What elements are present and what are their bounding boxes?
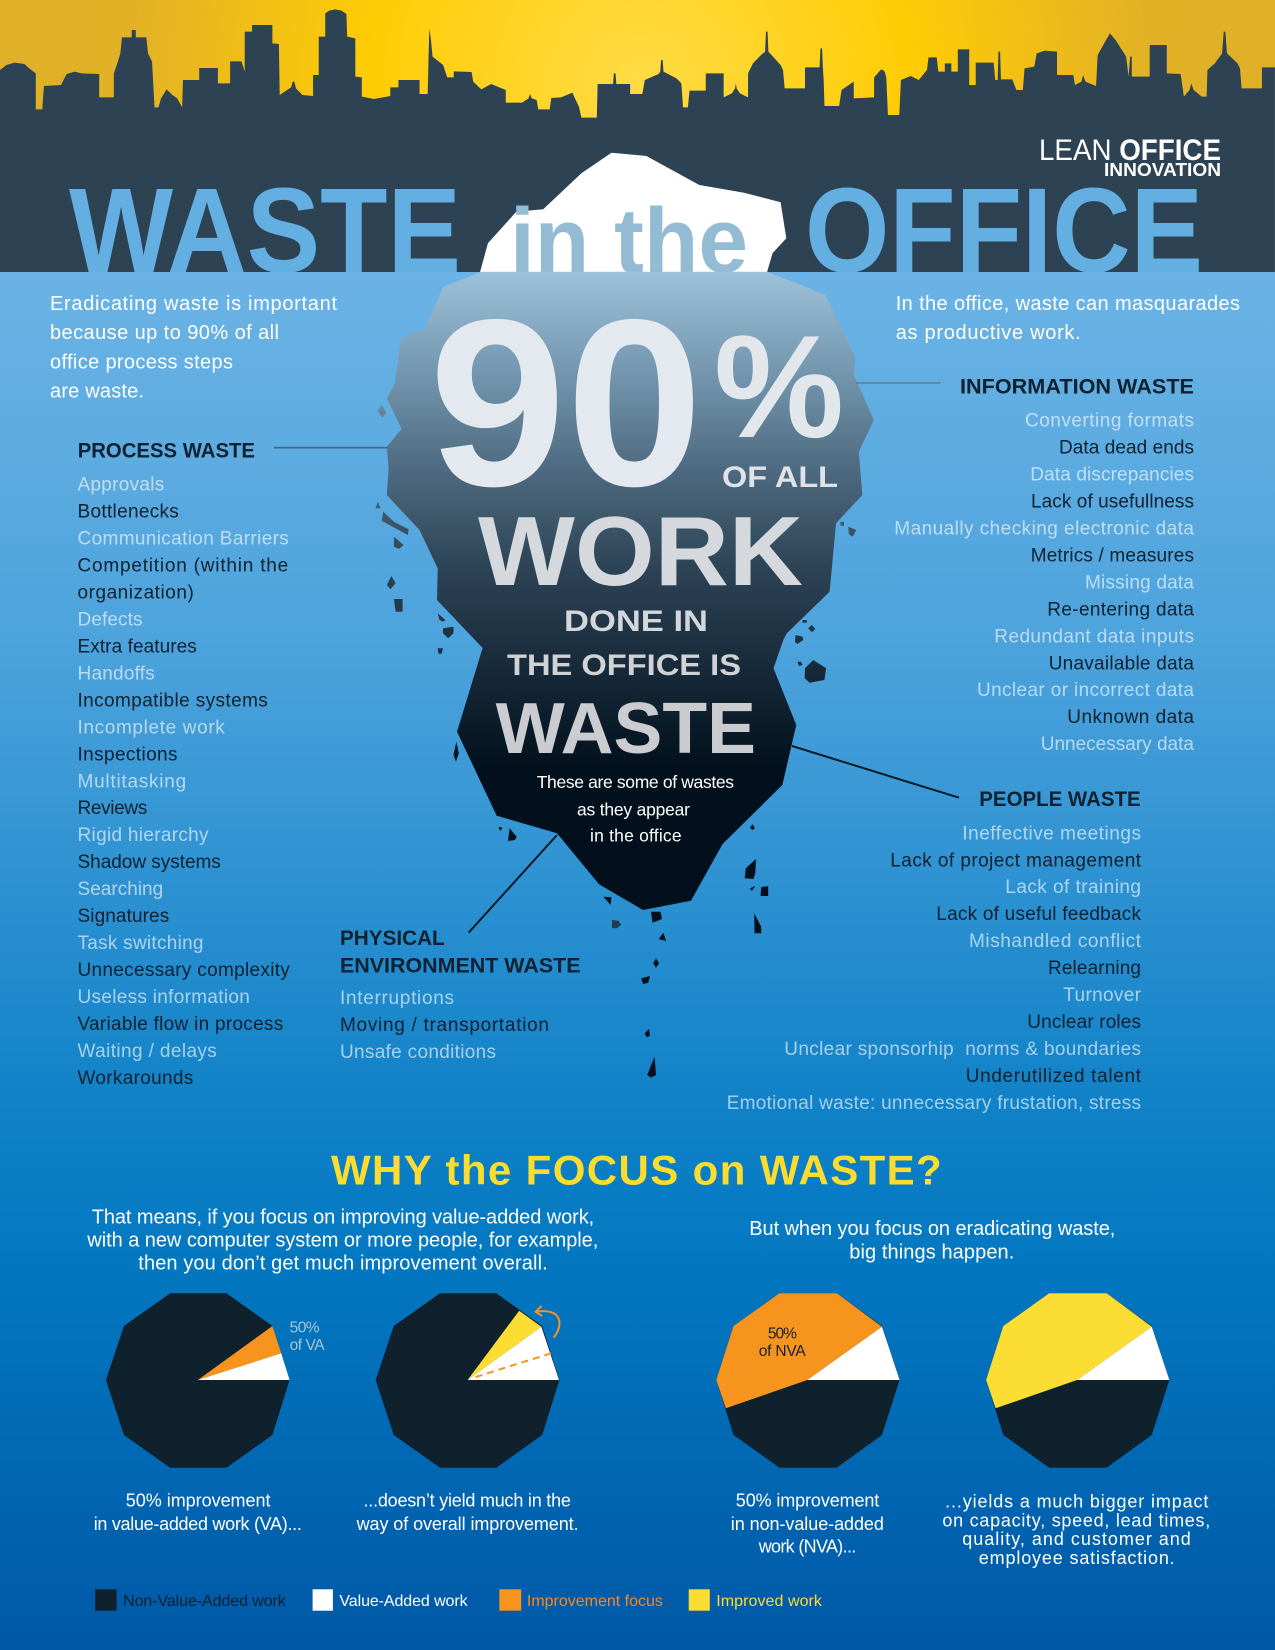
- list: process waste items: Approvals: [78, 475, 164, 496]
- logo: Lean Office Innovation: LEAN OFFICE: [1039, 134, 1221, 167]
- text: right explanation: big things happen.: [849, 1241, 1014, 1263]
- iceberg headline: 90% of all work done in the office is waste: 90: [429, 271, 703, 536]
- panel: information waste: [856, 374, 1194, 755]
- list: people waste items: Lack of project management: [890, 850, 1142, 871]
- panel: process waste: [78, 438, 388, 1089]
- iceberg caption: [537, 772, 734, 846]
- list: process waste items: Shadow systems: [78, 852, 221, 873]
- intro text left: are waste.: [50, 380, 144, 402]
- list: people waste items: Relearning: [1048, 958, 1141, 979]
- list: people waste items: Emotional waste: unnecessary frustation, stress: [727, 1093, 1141, 1114]
- iceberg headline: 90% of all work done in the office is waste: OF ALL: [722, 461, 838, 494]
- list: people waste items: Mishandled conflict: [969, 931, 1142, 952]
- intro text left: because up to 90% of all: [50, 322, 279, 344]
- title: WASTE in the OFFICE: in the: [510, 190, 748, 292]
- list: information waste items: Converting formats: [1025, 411, 1194, 432]
- leader line: process waste: [274, 447, 388, 449]
- list: people waste items: Lack of training: [1005, 877, 1141, 898]
- heading: physical environment waste: [340, 926, 580, 977]
- list: process waste items: Searching: [78, 879, 163, 900]
- list: process waste items: Communication Barriers: [78, 529, 289, 550]
- text: right explanation: But when you focus on eradicating waste,: [749, 1218, 1115, 1240]
- chart: overall result of value-added focus: [376, 1293, 559, 1468]
- panel: people waste: [727, 746, 1142, 1114]
- list: information waste items: Unavailable data: [1049, 653, 1194, 674]
- heading: physical environment waste: PHYSICAL: [340, 926, 445, 950]
- list: physical waste items: Interruptions: [340, 988, 454, 1009]
- caption: bigger impact: quality, and customer and: [962, 1529, 1191, 1549]
- sky background: [0, 0, 1275, 273]
- chart: improvement in value-added work: of VA: [290, 1337, 325, 1354]
- legend: Improvement focus: [527, 1593, 663, 1610]
- list: information waste items: Redundant data inputs: [994, 626, 1194, 647]
- list: process waste items: [78, 475, 290, 1089]
- chart: improvement in non-value-added work: 50%: [768, 1325, 797, 1342]
- text: left explanation: [86, 1206, 598, 1274]
- list: process waste items: organization): [78, 582, 194, 604]
- iceberg headline: 90% of all work done in the office is waste: [429, 271, 844, 769]
- chart: improvement in non-value-added work: of NVA: [759, 1343, 806, 1360]
- legend: Value-Added work: [339, 1593, 469, 1610]
- heading: why the focus on waste: WHY the FOCUS on WASTE?: [331, 1146, 942, 1193]
- legend: [95, 1589, 823, 1611]
- list: people waste items: [727, 823, 1142, 1114]
- caption: non-value-added improvement: 50% improvement: [736, 1491, 879, 1511]
- logo: Lean Office Innovation: INNOVATION: [1104, 160, 1221, 180]
- caption: non-value-added improvement: work (NVA)...: [758, 1536, 856, 1556]
- iceberg caption: as they appear: [577, 800, 690, 820]
- iceberg headline: 90% of all work done in the office is waste: THE OFFICE IS: [507, 649, 741, 682]
- caption: bigger impact: [942, 1492, 1210, 1568]
- iceberg below water: [387, 272, 874, 910]
- list: information waste items: Manually checking electronic data: [894, 518, 1194, 540]
- heading: physical environment waste: ENVIRONMENT WASTE: [340, 953, 580, 977]
- caption: bigger impact: employee satisfaction.: [979, 1548, 1175, 1568]
- intro text right: In the office, waste can masquarades: [896, 293, 1240, 315]
- list: physical waste items: Moving / transportation: [340, 1015, 549, 1036]
- list: people waste items: Unclear roles: [1027, 1012, 1141, 1033]
- list: people waste items: Unclear sponsorhip norms & boundaries: [784, 1039, 1141, 1060]
- list: people waste items: Ineffective meetings: [962, 823, 1141, 844]
- intro text left: [50, 293, 337, 402]
- logo: Lean Office Innovation: [1039, 134, 1221, 180]
- list: process waste items: Competition (within the: [78, 556, 288, 577]
- text: left explanation: with a new computer system or more people, for example,: [86, 1230, 598, 1252]
- list: process waste items: Reviews: [78, 798, 147, 819]
- list: process waste items: Bottlenecks: [78, 502, 179, 523]
- chart: improvement in non-value-added work: [716, 1293, 900, 1468]
- iceberg caption: in the office: [590, 826, 682, 846]
- list: process waste items: Variable flow in process: [78, 1014, 283, 1035]
- list: information waste items: Metrics / measures: [1031, 546, 1194, 566]
- list: information waste items: Re-entering data: [1047, 599, 1194, 620]
- caption: little overall improvement: way of overall improvement.: [356, 1514, 579, 1534]
- list: people waste items: Lack of useful feedback: [936, 904, 1142, 925]
- list: process waste items: Multitasking: [78, 771, 186, 792]
- list: physical waste items: [340, 988, 549, 1063]
- list: process waste items: Extra features: [78, 636, 197, 658]
- iceberg headline: 90% of all work done in the office is waste: DONE IN: [564, 605, 708, 638]
- leader line: physical waste: [469, 835, 557, 933]
- city skyline silhouette: [0, 9, 1275, 273]
- iceberg headline: 90% of all work done in the office is waste: WASTE: [496, 688, 756, 769]
- list: process waste items: Unnecessary complexity: [78, 960, 290, 981]
- intro text right: [896, 293, 1240, 344]
- leader line: people waste: [792, 746, 959, 798]
- list: process waste items: Incompatible systems: [78, 690, 268, 711]
- heading: process waste: PROCESS WASTE: [78, 438, 255, 462]
- list: physical waste items: Unsafe conditions: [340, 1042, 496, 1063]
- list: process waste items: Handoffs: [78, 663, 155, 684]
- list: people waste items: Turnover: [1063, 985, 1142, 1006]
- caption: little overall improvement: [356, 1491, 579, 1534]
- legend: Improved work: [716, 1593, 823, 1610]
- list: process waste items: Waiting / delays: [78, 1041, 217, 1062]
- iceberg headline: 90% of all work done in the office is waste: %: [714, 305, 844, 468]
- panel: physical environment waste: [340, 835, 580, 1063]
- caption: bigger impact: on capacity, speed, lead times,: [942, 1511, 1210, 1531]
- caption: non-value-added improvement: in non-value-added: [731, 1514, 884, 1534]
- title: WASTE in the OFFICE: OFFICE: [805, 162, 1203, 298]
- caption: bigger impact: ...yields a much bigger impact: [945, 1492, 1208, 1512]
- list: process waste items: Incomplete work: [78, 717, 225, 738]
- list: information waste items: Lack of usefullness: [1031, 492, 1194, 513]
- list: information waste items: [894, 411, 1194, 755]
- iceberg caption: These are some of wastes: [537, 772, 734, 792]
- caption: value-added improvement: 50% improvement: [126, 1491, 270, 1511]
- iceberg tip above water: [480, 153, 786, 273]
- legend: Non-Value-Added work: [123, 1593, 287, 1610]
- list: process waste items: Useless information: [78, 987, 250, 1008]
- title: WASTE in the OFFICE: [69, 162, 1203, 298]
- list: information waste items: Data dead ends: [1059, 438, 1194, 459]
- list: process waste items: Workarounds: [78, 1068, 193, 1089]
- chart: improvement in value-added work: [106, 1293, 325, 1468]
- chart: overall result of waste focus: [986, 1293, 1169, 1468]
- list: information waste items: Unnecessary data: [1041, 734, 1194, 755]
- intro text left: Eradicating waste is important: [50, 293, 337, 315]
- list: process waste items: Task switching: [78, 933, 204, 954]
- list: process waste items: Inspections: [78, 744, 178, 765]
- iceberg fragments: [375, 405, 856, 1078]
- list: process waste items: Defects: [78, 610, 142, 630]
- text: right explanation: [749, 1218, 1115, 1263]
- heading: people waste: PEOPLE WASTE: [979, 787, 1141, 811]
- leader line: information waste: [856, 382, 941, 384]
- text: left explanation: That means, if you focus on improving value-added work,: [92, 1206, 594, 1228]
- heading: information waste: INFORMATION WASTE: [960, 374, 1194, 398]
- caption: non-value-added improvement: [731, 1491, 884, 1556]
- iceberg headline: 90% of all work done in the office is waste: WORK: [478, 496, 803, 606]
- list: information waste items: Unknown data: [1067, 707, 1194, 728]
- list: process waste items: Rigid hierarchy: [78, 825, 209, 846]
- chart: improvement in value-added work: 50%: [290, 1319, 320, 1336]
- caption: little overall improvement: ...doesn’t yield much in the: [364, 1491, 571, 1511]
- list: process waste items: Signatures: [78, 906, 169, 927]
- list: information waste items: Unclear or incorrect data: [977, 680, 1194, 701]
- list: information waste items: Missing data: [1085, 572, 1194, 593]
- intro text right: as productive work.: [896, 322, 1081, 344]
- caption: value-added improvement: in value-added work (VA)...: [94, 1514, 302, 1534]
- caption: value-added improvement: [94, 1491, 302, 1534]
- text: left explanation: then you don’t get much improvement overall.: [138, 1252, 548, 1274]
- intro text left: office process steps: [50, 351, 233, 373]
- list: information waste items: Data discrepancies: [1030, 465, 1194, 486]
- title: WASTE in the OFFICE: WASTE: [69, 162, 461, 298]
- list: people waste items: Underutilized talent: [966, 1066, 1142, 1087]
